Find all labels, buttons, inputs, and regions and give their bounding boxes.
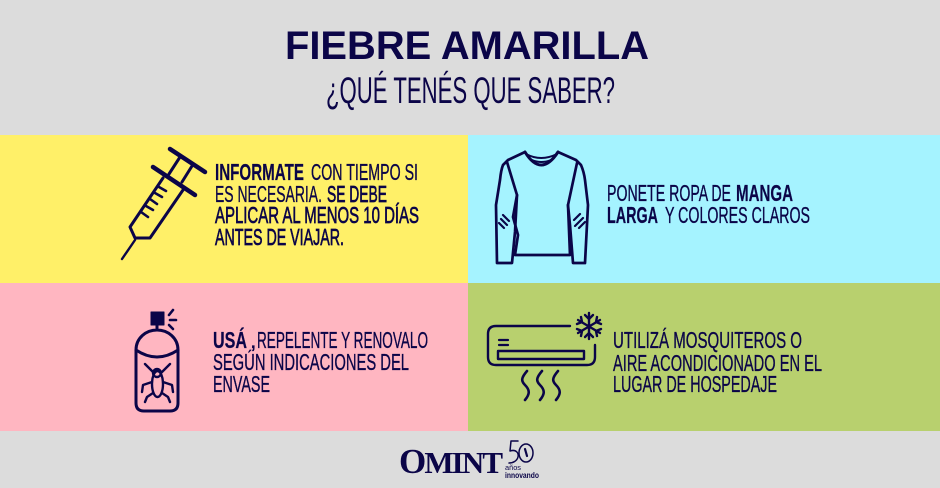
logo: Omint 50 años: años (505, 463, 521, 472)
text: air conditioning: LUGAR DE HOSPEDAJE (613, 371, 777, 397)
text: repellent: SEGÚN INDICACIONES DEL (213, 349, 409, 375)
logo: Omint 50 años: innovando (505, 471, 539, 480)
text: clothing: MANGA (736, 180, 793, 206)
text: repellent (213, 326, 428, 397)
text: repellent: , (250, 327, 257, 353)
text: air conditioning: AIRE ACONDICIONADO EN EL (613, 350, 822, 376)
logo: Omint 50 años: OMINT (399, 442, 503, 481)
text: vaccine: SE DEBE (327, 181, 387, 207)
panel: air conditioning (468, 283, 940, 431)
text: repellent: ENVASE (213, 371, 270, 397)
text: vaccine: INFORMATE (215, 159, 304, 185)
text: air conditioning (613, 327, 822, 397)
icon: repellent spray (136, 310, 178, 411)
text: vaccine: CON TIEMPO SI (311, 159, 418, 185)
panel: clothing (468, 135, 940, 283)
logo mark: 50 (509, 441, 533, 463)
icon: air conditioner (488, 313, 601, 400)
icon: snowflake (577, 313, 601, 339)
text: air conditioning: UTILIZÁ MOSQUITEROS O (613, 327, 802, 353)
text: vaccine: ES NECESARIA. (215, 181, 322, 207)
text: vaccine (215, 159, 419, 250)
icon: syringe (122, 149, 205, 259)
subtitle: ¿QUÉ TENÉS QUE SABER? (326, 70, 615, 111)
text: repellent: USÁ (213, 326, 247, 353)
title: FIEBRE AMARILLA (285, 24, 649, 68)
text: clothing (607, 180, 810, 228)
text: clothing: PONETE ROPA DE (607, 180, 731, 206)
text: vaccine: APLICAR AL MENOS 10 DÍAS (215, 202, 419, 228)
panel: repellent (0, 283, 468, 431)
text: vaccine: ANTES DE VIAJAR. (215, 224, 344, 250)
icon: long-sleeve shirt (496, 152, 588, 263)
text: clothing: Y COLORES CLAROS (665, 202, 810, 228)
text: repellent: REPELENTE Y RENOVALO (257, 327, 428, 353)
text: clothing: LARGA (607, 202, 658, 228)
panel: vaccine (0, 135, 468, 283)
